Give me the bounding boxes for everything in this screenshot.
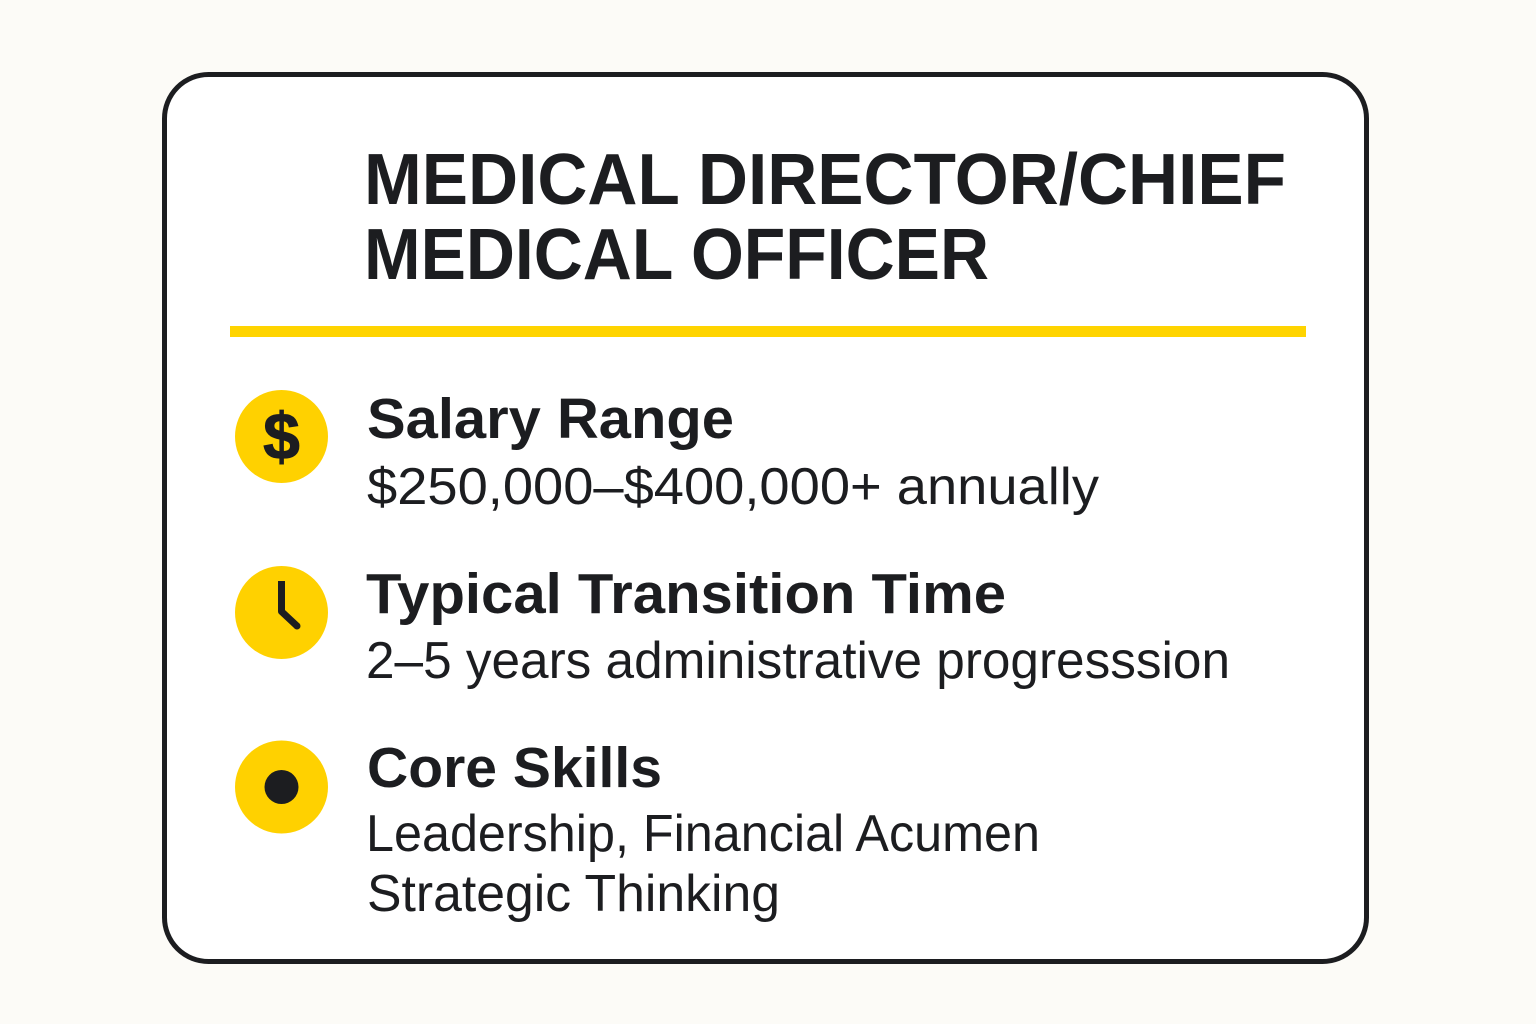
skills list: Leadership, Financial Acumen: [366, 805, 1040, 863]
panel: career card: [164, 74, 1366, 962]
section: transition time: [235, 562, 1230, 690]
icon: dot: [235, 740, 328, 834]
icon: dollar: $: [263, 399, 300, 473]
skills list: Strategic Thinking: [367, 865, 780, 923]
transition heading: Typical Transition Time: [366, 562, 1006, 626]
salary heading: Salary Range: [367, 387, 734, 451]
salary value: $250,000–$400,000+ annually: [367, 458, 1099, 516]
title: MEDICAL DIRECTOR/CHIEF: [364, 140, 1286, 220]
section: core skills: [235, 736, 1040, 923]
skills heading: Core Skills: [367, 736, 662, 800]
title: MEDICAL OFFICER: [364, 215, 989, 295]
skills list: [366, 805, 1040, 923]
section: salary range: [235, 387, 1099, 516]
icon: dollar: [235, 390, 328, 483]
title divider: [230, 326, 1306, 337]
title: [364, 140, 1286, 295]
transition value: 2–5 years administrative progresssion: [366, 632, 1230, 690]
icon: clock: [235, 566, 328, 659]
